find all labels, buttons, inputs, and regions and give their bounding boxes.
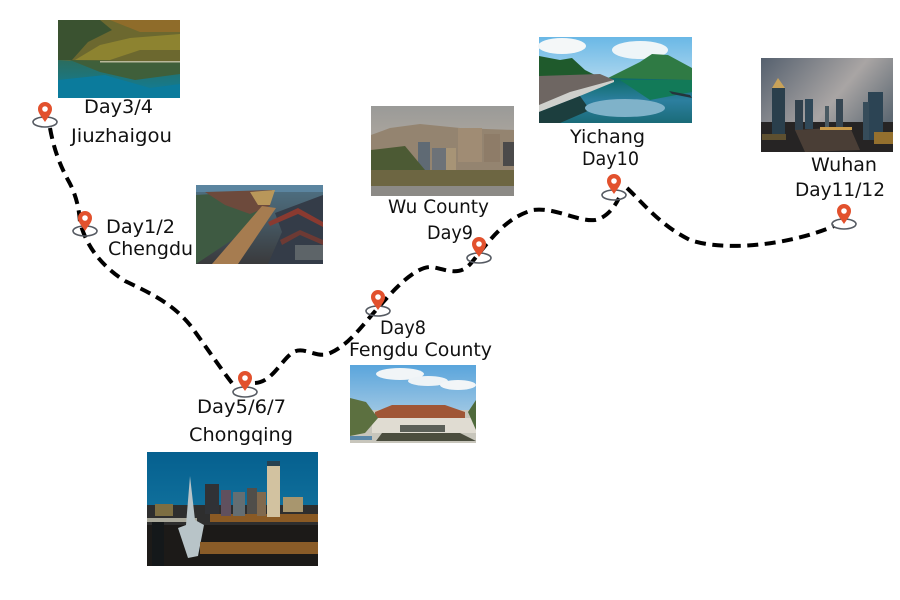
label: Jiuzhaigou: Day3/4 [84, 96, 153, 118]
route: dashed path Jiuzhaigou to Chongqing [50, 128, 235, 387]
marker: Chengdu [73, 211, 97, 236]
photo: Yichang river [538, 37, 692, 123]
photo: Wuhan skyline [761, 58, 893, 152]
photo: Fengdu museum [350, 365, 476, 443]
route: dashed path Chongqing to Yichang [255, 198, 619, 383]
photo: Chengdu old town [196, 185, 323, 264]
label: Wu County [388, 196, 489, 244]
label: Jiuzhaigou: Jiuzhaigou [70, 125, 172, 147]
label: Chongqing: Chongqing [189, 424, 293, 446]
marker: Wu County [467, 237, 491, 263]
label: Wuhan: Day11/12 [795, 179, 885, 201]
marker: Jiuzhaigou [33, 102, 57, 127]
label: Chongqing [189, 396, 293, 446]
marker: Wuhan [832, 204, 856, 229]
label: Wu County: Wu County [388, 196, 489, 218]
photo: Jiuzhaigou lake [58, 20, 180, 98]
photo: Wu County town [371, 106, 514, 196]
label: Fengdu County [349, 317, 492, 361]
label: Fengdu County: Fengdu County [349, 339, 492, 361]
marker: Fengdu County [366, 290, 390, 316]
label: Yichang: Day10 [582, 148, 639, 170]
label: Chengdu: Day1/2 [106, 216, 175, 238]
route: dashed path Yichang to Wuhan [627, 188, 834, 246]
label: Wuhan: Wuhan [811, 154, 877, 176]
label: Wuhan [795, 154, 885, 201]
photo: Chongqing skyline [147, 452, 318, 566]
label: Yichang: Yichang [569, 126, 645, 148]
label: Chongqing: Day5/6/7 [197, 396, 286, 418]
label: Chengdu: Chengdu [108, 238, 193, 260]
marker: Yichang [602, 174, 626, 200]
label: Wu County: Day9 [427, 222, 473, 244]
label: Yichang [569, 126, 645, 170]
label: Jiuzhaigou [70, 96, 172, 147]
marker: Chongqing [233, 371, 257, 397]
label: Chengdu [106, 216, 193, 260]
label: Fengdu County: Day8 [380, 317, 426, 339]
